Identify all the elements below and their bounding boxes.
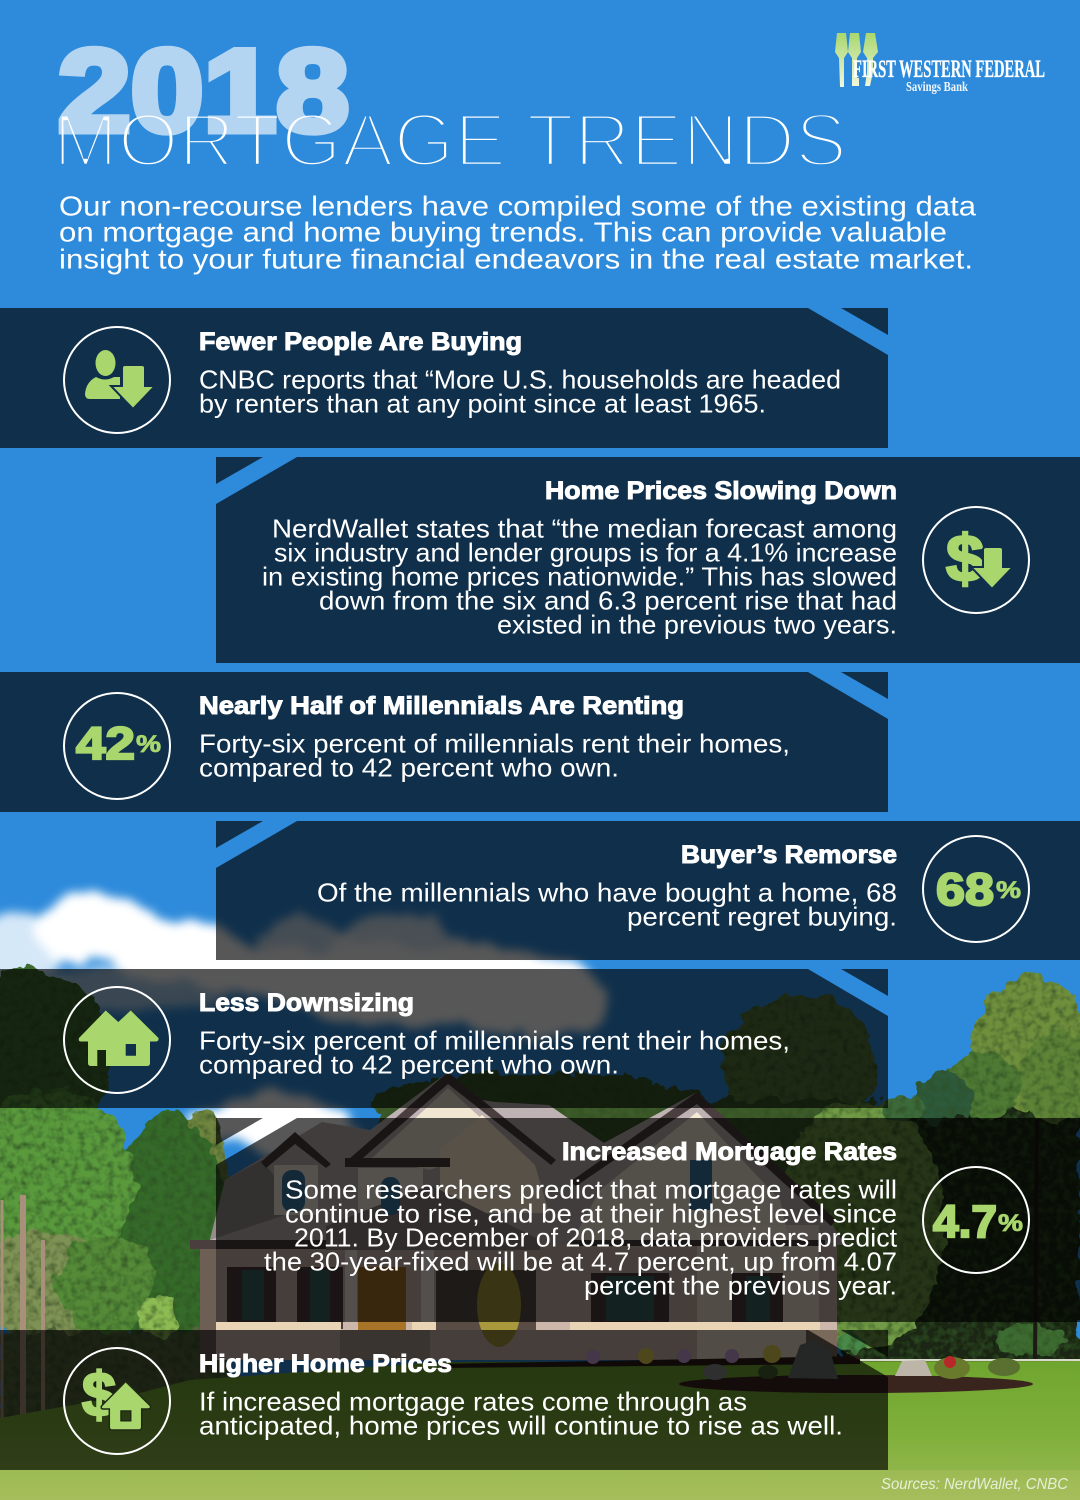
body text — [199, 728, 790, 782]
icon: dollar with down arrow: $ — [946, 521, 984, 595]
body text: Forty-six percent of millennials rent their homes, — [199, 1026, 790, 1056]
icon: 4.7 percent — [923, 1167, 1029, 1273]
icon: 68 percent — [923, 836, 1029, 942]
roof shade — [210, 1160, 300, 1240]
lawn sunlit edge — [0, 1470, 1080, 1500]
clouds — [0, 896, 610, 1160]
panel: Home Prices Slowing Down — [216, 457, 1080, 663]
heading: Higher Home Prices — [199, 1350, 452, 1378]
panel shape — [0, 969, 888, 1108]
panel: Increased Mortgage Rates — [216, 1118, 1080, 1322]
panel: Fewer People Are Buying — [0, 308, 888, 448]
icon: 42 percent — [64, 693, 170, 799]
panel: Higher Home Prices — [0, 1330, 888, 1470]
body text: If increased mortgage rates come through as — [199, 1386, 747, 1416]
icon: 68 percent: 68 — [936, 864, 994, 915]
body text: the 30-year-fixed will be at 4.7 percent, up from 4.07 — [264, 1246, 897, 1276]
panel: Nearly Half of Millennials Are Renting — [0, 672, 888, 812]
brick walls — [200, 1245, 837, 1360]
body text: NerdWallet states that “the median forecast among — [272, 514, 897, 544]
body text: Of the millennials who have bought a home, 68 — [317, 878, 897, 908]
house — [190, 1072, 845, 1360]
ornamental tree — [477, 1263, 521, 1347]
porch columns — [345, 1250, 357, 1322]
garden beds and rocks — [440, 1340, 1033, 1393]
front door — [358, 1267, 406, 1330]
source credit: Sources: NerdWallet, CNBC — [881, 1476, 1068, 1493]
body text: 2011. By December of 2018, data providers predict — [294, 1222, 898, 1252]
cream stone band — [216, 1322, 820, 1330]
siding gable main — [372, 1088, 505, 1170]
heading: Increased Mortgage Rates — [562, 1138, 897, 1166]
icon: 42 percent: 42 — [76, 718, 135, 769]
inner wall — [358, 1168, 423, 1223]
body text: existed in the previous two years. — [497, 610, 897, 640]
title: 2018 Mortgage Trends — [53, 25, 847, 182]
body text: compared to 42 percent who own. — [199, 752, 619, 782]
background photo: house, trees and lawn — [0, 896, 1080, 1500]
body text: down from the six and 6.3 percent rise that had — [319, 586, 897, 616]
background trees — [0, 970, 1080, 1430]
title year: 2018: 2018 — [58, 25, 349, 156]
panel shape — [216, 821, 1080, 960]
driveway — [860, 1359, 1080, 1361]
body text: compared to 42 percent who own. — [199, 1050, 619, 1080]
lower stone in notch — [806, 1330, 837, 1360]
raw brick outside panel — [200, 1248, 216, 1360]
title line: MORTGAGE TRENDS: MORTGAGE TRENDS — [53, 98, 847, 182]
intro text: Our non-recourse lenders have compiled some of the existing data — [59, 190, 976, 222]
heading: Home Prices Slowing Down — [545, 477, 897, 505]
panel shape — [0, 672, 888, 812]
ground floor shutters and windows — [227, 1267, 783, 1329]
body text — [199, 1026, 790, 1080]
dark porch — [436, 1270, 536, 1330]
body text: CNBC reports that “More U.S. households are headed — [199, 364, 841, 394]
body text — [264, 1174, 898, 1300]
logo tagline: Savings Bank — [906, 80, 968, 95]
panel shape — [0, 1330, 888, 1470]
body text: Forty-six percent of millennials rent their homes, — [199, 728, 790, 758]
heading: Buyer’s Remorse — [681, 841, 897, 869]
body text: anticipated, home prices will continue to rise as well. — [199, 1410, 843, 1440]
intro text: insight to your future financial endeavors in the real estate market. — [59, 244, 973, 274]
panel shape — [0, 308, 888, 448]
right stone — [697, 1225, 819, 1360]
panel shape — [216, 457, 1080, 663]
body text: six industry and lender groups is for a 4.1% increase — [274, 538, 897, 568]
icon: dollar with down arrow — [923, 507, 1029, 613]
intro text — [59, 190, 976, 274]
roof — [190, 1072, 845, 1245]
body text — [262, 514, 897, 640]
icon: 68 percent: % — [996, 877, 1021, 904]
icon: 4.7 percent: % — [998, 1210, 1023, 1237]
icon: dollar with house — [64, 1348, 170, 1454]
panel: Buyer's Remorse — [216, 821, 1080, 960]
heading: Nearly Half of Millennials Are Renting — [199, 692, 684, 720]
porch steps — [340, 1330, 430, 1360]
body text: in existing home prices nationwide.” This has slowed — [262, 562, 897, 592]
icon: 4.7 percent: 4.7 — [933, 1196, 997, 1247]
body text: by renters than at any point since at least 1965. — [199, 388, 766, 418]
heading: Fewer People Are Buying — [199, 328, 522, 356]
icon: person with down arrow — [64, 327, 170, 433]
icon: dollar with house: $ — [82, 1361, 116, 1430]
panel shape — [216, 1118, 1080, 1322]
body text — [199, 364, 841, 418]
stone gable — [440, 1115, 549, 1213]
bare pine trunks — [2, 1120, 1037, 1432]
heading: Less Downsizing — [199, 989, 414, 1017]
icon: two houses — [64, 987, 170, 1093]
intro text: on mortgage and home buying trends. This can provide valuable — [59, 216, 947, 248]
dormer wall — [274, 1165, 318, 1215]
body text — [317, 878, 897, 932]
body text: Some researchers predict that mortgage rates will — [285, 1174, 897, 1204]
logo emblem — [835, 33, 878, 87]
eave lines — [190, 1072, 836, 1250]
lawn — [0, 1361, 1080, 1500]
body text: percent regret buying. — [627, 902, 897, 932]
body text — [199, 1386, 843, 1440]
body text: continue to rise, and be at their highest level since — [285, 1198, 897, 1228]
dormer windows — [282, 1160, 712, 1215]
logo: First Western Federal Savings Bank — [835, 33, 1045, 95]
panel: Less Downsizing — [0, 969, 888, 1108]
icon: 42 percent: % — [136, 731, 161, 758]
body text: percent the previous year. — [584, 1270, 897, 1300]
right siding gable — [570, 1112, 790, 1245]
